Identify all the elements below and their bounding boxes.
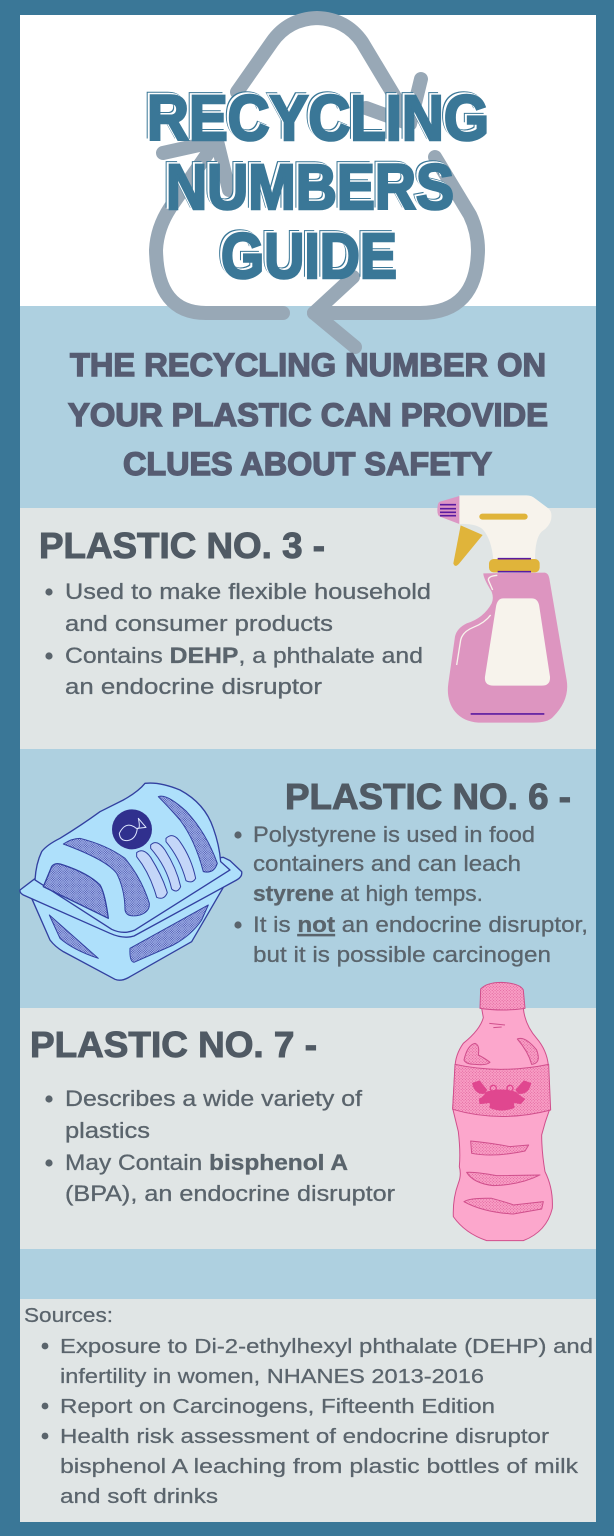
text block: plastic no. 3 bullets <box>45 579 431 699</box>
title: NUMBERS <box>166 151 454 223</box>
text block: plastic no. 6 bullets: but it is possible carcinogen <box>253 942 551 967</box>
text block: sources: Exposure to Di-2-ethylhexyl phthalate (DEHP) and <box>60 1335 593 1358</box>
text block: sources: bisphenol A leaching from plastic bottles of milk <box>60 1455 579 1478</box>
panel: plastic 7 background <box>20 1008 596 1249</box>
intro heading: THE RECYCLING NUMBER ON <box>70 347 546 383</box>
title: RECYCLING <box>147 82 489 154</box>
icon: plastic bottle <box>453 982 552 1241</box>
text block: sources <box>24 1304 593 1508</box>
text block: sources: Health risk assessment of endocrine disruptor <box>60 1425 549 1448</box>
icon: polystyrene food container <box>20 783 242 980</box>
text block: plastic no. 3 bullets: and consumer products <box>65 611 333 636</box>
text block: plastic no. 7 bullets: Describes a wide variety of <box>65 1086 363 1111</box>
panel: sources background <box>20 1299 596 1522</box>
icon: recycling arrows <box>156 18 478 347</box>
text block: plastic no. 7 bullets <box>45 1086 395 1206</box>
text block: sources: Sources: <box>24 1304 113 1327</box>
text block: plastic no. 7 bullets: plastics <box>65 1118 150 1143</box>
text block: plastic no. 6 bullets: Polystyrene is used in food <box>253 822 535 847</box>
title: GUIDE <box>221 220 397 292</box>
panel: spacer band <box>20 1249 596 1299</box>
text block: plastic no. 3 bullets: Used to make flexible household <box>65 579 431 604</box>
panel: plastic 3 background <box>20 508 596 749</box>
text block: plastic no. 6 bullets <box>234 822 588 967</box>
panel: intro background <box>20 306 596 508</box>
text block: plastic no. 7 bullets: May Contain bisphenol A <box>65 1150 348 1175</box>
text block: sources: infertility in women, NHANES 2013-2016 <box>60 1365 484 1388</box>
text block: plastic no. 3 bullets: Contains DEHP , a phthalate and <box>65 643 423 668</box>
title <box>147 82 489 292</box>
text block: plastic no. 3 bullets: an endocrine disruptor <box>65 674 322 699</box>
text block: plastic no. 6 bullets: styrene at high temps. <box>253 881 483 906</box>
text block: plastic no. 6 bullets: containers and can leach <box>253 851 521 876</box>
intro heading: CLUES ABOUT SAFETY <box>123 446 492 482</box>
text block: sources: and soft drinks <box>60 1485 218 1508</box>
text block: plastic no. 7 bullets: (BPA), an endocrine disruptor <box>65 1181 395 1206</box>
panel: plastic 6 background <box>20 749 596 1008</box>
panel: title background <box>20 15 596 306</box>
heading: plastic no. 3: PLASTIC NO. 3 - <box>39 525 325 566</box>
heading: plastic no. 6: PLASTIC NO. 6 - <box>285 776 571 817</box>
text block: plastic no. 6 bullets: It is not an endocrine disruptor, <box>253 912 588 937</box>
icon: spray bottle <box>437 495 567 723</box>
intro heading <box>68 347 548 482</box>
intro heading: YOUR PLASTIC CAN PROVIDE <box>68 397 548 433</box>
heading: plastic no. 7: PLASTIC NO. 7 - <box>30 1024 317 1065</box>
text block: sources: Report on Carcinogens, Fifteenth Edition <box>60 1395 495 1418</box>
